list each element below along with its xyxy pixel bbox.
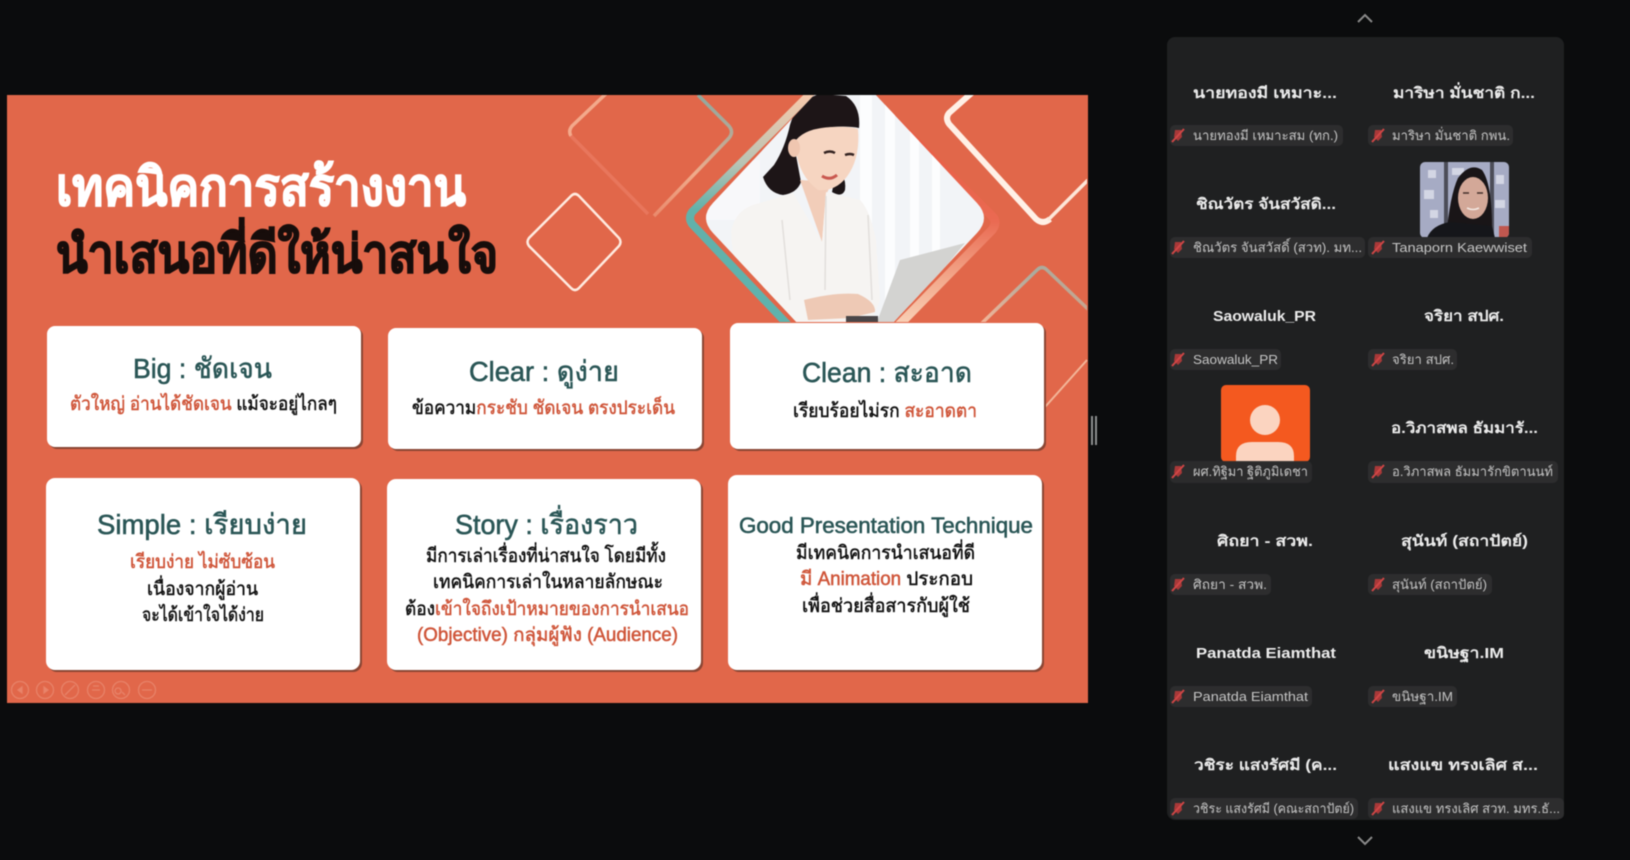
outline: top-right white diamond left side — [947, 90, 1050, 222]
card: Story — [387, 479, 703, 672]
card: Big: Big : ชัดเจน — [133, 353, 272, 384]
card: Clean: Clean : สะอาด — [802, 357, 972, 388]
tile: row 6 right: ขนิษฐา.IM — [1424, 644, 1504, 663]
outline: upper-left diamond, faint lower-left edge — [571, 136, 648, 214]
tile: row 3 right — [1368, 307, 1504, 370]
title line 2: นำเสนอที่ดีให้น่าสนใจ — [56, 218, 498, 284]
tile: row 7 left: วชิระ แสงรัศมี (คณะสถาปัตย์) — [1193, 801, 1354, 816]
outline: lower-right diamond — [981, 268, 1090, 324]
title — [56, 159, 498, 284]
card: Good Presentation Technique — [728, 475, 1044, 672]
tile: row 4 left: ผศ.ทิฐิมา ฐิติภูมิเดชา — [1193, 464, 1308, 480]
card: Clean: เรียบร้อยไม่รก สะอาดตา — [793, 400, 977, 422]
tile: row 7 right: แสงแข ทรงเลิศ ส... — [1388, 756, 1538, 774]
tile: row 2 left — [1170, 195, 1365, 258]
tile: row 6 right: ขนิษฐา.IM — [1392, 689, 1453, 705]
tile: row 6 left — [1170, 645, 1336, 707]
outline: upper-left diamond, right edge — [654, 95, 732, 216]
hair tail on the right — [832, 176, 845, 195]
title line 1: เทคนิคการสร้างงาน — [56, 159, 466, 217]
tile: row 7 right — [1368, 756, 1564, 819]
tile: row 3 right: จริยา สปศ. — [1424, 307, 1504, 325]
card: Story: ต้องเข้าใจถึงเป้าหมายของการนำเสนอ — [405, 598, 689, 620]
card: Simple: จะได้เข้าใจได้ง่าย — [142, 604, 264, 626]
slide background — [7, 95, 1088, 703]
tile: row 3 left: Saowaluk_PR — [1213, 308, 1316, 325]
tile: row 5 right: สุนันท์ (สถาปัตย์) — [1392, 577, 1487, 593]
small white diamond — [528, 194, 620, 290]
tile: row 2 left: ชิณวัตร จันสวัสดิ... — [1196, 195, 1336, 213]
face — [796, 127, 858, 190]
tile: row 5 left: ศิถยา - สวพ. — [1193, 577, 1267, 592]
splitter handle — [1092, 416, 1096, 445]
tile: row 1 left: นายทองมี เหมาะสม (ทก.) — [1193, 128, 1338, 143]
stripe: red-to-peach gradient — [896, 140, 999, 323]
card: Good Presentation Technique: มีเทคนิคการนำเสนอที่ดี — [796, 539, 975, 564]
card: Simple — [46, 478, 362, 672]
tile: row 4 right: อ.วิภาสพล ธัมมารักขิตานนท์ — [1392, 464, 1553, 479]
stripe: teal gradient — [690, 93, 811, 326]
card: Story: มีการเล่าเรื่องที่น่าสนใจ โดยมีทั้ง — [426, 542, 666, 567]
card: Good Presentation Technique: มี Animation ประกอบ — [800, 568, 973, 590]
participant avatar: orange tile — [1221, 385, 1310, 462]
keyboard — [846, 316, 878, 322]
icon: chevron up — [1358, 15, 1372, 22]
tile: row 1 left — [1170, 85, 1343, 146]
tile: row 2 right: Tanaporn Kaewwiset — [1392, 240, 1527, 255]
card: Big — [47, 326, 363, 449]
curtain stripes — [860, 96, 940, 295]
card: Big: ตัวใหญ่ อ่านได้ชัดเจน แม้จะอยู่ไกลๆ — [70, 393, 337, 415]
background left shade — [706, 160, 753, 220]
icon: chevron down — [1358, 837, 1372, 844]
eyes and smile — [824, 152, 854, 155]
card: Simple: เนื่องจากผู้อ่าน — [147, 575, 258, 600]
tile: row 5 right: สุนันท์ (สถาปัตย์) — [1401, 532, 1528, 551]
neck — [800, 180, 832, 242]
ear — [788, 139, 800, 157]
tile: row 5 right — [1368, 532, 1528, 595]
tile: row 4 right: อ.วิภาสพล ธัมมารั... — [1391, 419, 1538, 437]
tile: row 5 left: ศิถยา - สวพ. — [1217, 532, 1313, 550]
participant video: Tanaporn — [1420, 162, 1509, 238]
card: Clear: ข้อความกระชับ ชัดเจน ตรงประเด็น — [412, 395, 675, 419]
card: Clear: Clear : ดูง่าย — [469, 356, 619, 389]
participants panel — [1167, 37, 1564, 820]
tile: row 3 left — [1170, 308, 1316, 370]
tile: row 5 left — [1170, 532, 1313, 595]
tile: row 7 right: แสงแข ทรงเลิศ สวท. มทร.ธั... — [1392, 801, 1560, 816]
tile: row 3 right: จริยา สปศ. — [1392, 352, 1454, 367]
hands — [804, 294, 875, 320]
accent line lower right — [1045, 360, 1087, 407]
outline: top-right white diamond right side — [1048, 180, 1088, 220]
card: Simple: เรียบง่าย ไม่ซับซ้อน — [130, 551, 275, 573]
tile: row 2 right — [1368, 237, 1532, 258]
tile: row 7 left: วชิระ แสงรัศมี (ค... — [1194, 756, 1337, 774]
blouse — [734, 192, 872, 320]
tile: row 6 left: Panatda Eiamthat — [1196, 645, 1336, 662]
tile: row 2 left: ชิณวัตร จันสวัสดิ์ (สวท). มท... — [1193, 238, 1362, 255]
outline: upper-left diamond, peach corner — [568, 94, 607, 137]
tile: row 6 right — [1368, 644, 1504, 707]
card: Clean — [730, 323, 1046, 451]
card: Story: Story : เรื่องราว — [455, 505, 638, 540]
card: Clear — [388, 328, 704, 451]
tile: row 3 left: Saowaluk_PR — [1193, 352, 1278, 367]
tile: row 1 right: มาริษา มั่นชาติ กพน. — [1392, 127, 1510, 143]
tile: row 1 left: นายทองมี เหมาะ... — [1193, 85, 1337, 102]
photo background — [706, 94, 985, 322]
tile: row 4 left — [1170, 461, 1312, 483]
card: Good Presentation Technique: Good Presentation Technique — [739, 513, 1033, 538]
card: Story: เทคนิคการเล่าในหลายลักษณะ — [433, 571, 663, 593]
card: Good Presentation Technique: เพื่อช่วยสื่อสารกับผู้ใช้ — [802, 592, 970, 617]
tile: row 7 left — [1170, 756, 1358, 819]
tile: row 1 right: มาริษา มั่นชาติ ก... — [1393, 82, 1535, 102]
tile: row 6 left: Panatda Eiamthat — [1193, 689, 1308, 704]
blouse shading — [782, 196, 872, 300]
card: Simple: Simple : เรียบง่าย — [97, 509, 307, 540]
hair — [763, 94, 859, 195]
tile: row 4 right — [1368, 419, 1558, 483]
decorative diamond outlines — [570, 88, 1090, 326]
card: Story: (Objective) กลุ่มผู้ฟัง (Audience) — [417, 625, 678, 647]
laptop — [877, 243, 965, 322]
slideshow controls — [12, 682, 156, 698]
photo: woman with laptop — [705, 94, 985, 323]
tile: row 1 right — [1368, 82, 1535, 146]
